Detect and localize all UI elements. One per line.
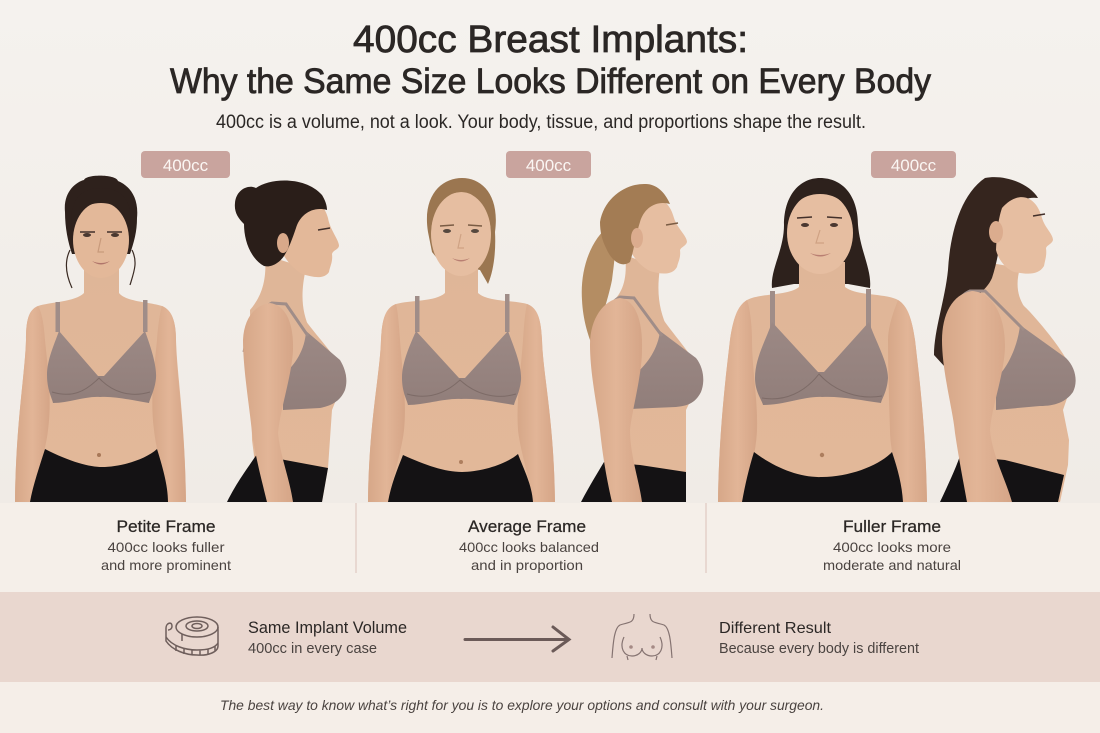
label: petite frame — [101, 517, 231, 573]
panel: petite frame figures — [15, 151, 346, 502]
subtitle: 400cc is a volume, not a look. Your body, tissue, and proportions shape the result. — [216, 112, 866, 133]
figure: fuller front view — [718, 178, 927, 502]
label: average frame: and in proportion — [471, 557, 583, 573]
volume badge: petite — [141, 151, 230, 178]
volume badge: average — [506, 151, 591, 178]
panel: average frame figures — [368, 151, 703, 502]
label: average frame: 400cc looks balanced — [459, 539, 599, 555]
page background — [0, 0, 1100, 503]
panel: footer note — [0, 682, 1100, 733]
figure: average side view — [581, 184, 703, 502]
panel: same volume, different result band — [0, 592, 1100, 682]
label: average frame: Average Frame — [468, 517, 586, 536]
panel: footer note: The best way to know what’s right for you is to explore your options and consult with your surgeon. — [220, 697, 824, 713]
volume badge: fuller — [871, 151, 956, 178]
title: Why the Same Size Looks Different on Every Body — [170, 62, 931, 101]
volume badge: fuller: 400cc — [891, 156, 937, 175]
text: different result: Different Result — [719, 620, 832, 637]
volume badge: petite: 400cc — [163, 156, 209, 175]
label: average frame — [459, 517, 599, 573]
title: 400cc Breast Implants: — [353, 19, 748, 61]
volume badge: average: 400cc — [526, 156, 572, 175]
label: fuller frame: moderate and natural — [823, 557, 961, 573]
panel: frame labels band — [0, 503, 1100, 592]
label: petite frame: 400cc looks fuller — [108, 539, 225, 555]
title — [170, 19, 931, 101]
label: petite frame: Petite Frame — [116, 517, 216, 536]
figure: petite front view — [15, 176, 186, 502]
text: different result — [719, 620, 919, 657]
arrow — [465, 627, 569, 651]
panel: fuller frame figures — [718, 151, 1076, 502]
label: fuller frame — [823, 517, 961, 573]
text: same implant volume: Same Implant Volume — [248, 619, 407, 637]
label: fuller frame: 400cc looks more — [833, 539, 951, 555]
figure: petite side view — [227, 181, 346, 502]
label: petite frame: and more prominent — [101, 557, 231, 573]
text: same implant volume — [248, 619, 407, 657]
label: fuller frame: Fuller Frame — [843, 517, 941, 536]
figure: fuller side view — [934, 177, 1076, 502]
text: different result: Because every body is different — [719, 641, 919, 657]
icon: measuring tape — [166, 617, 218, 655]
text: same implant volume: 400cc in every case — [248, 641, 377, 657]
figure: average front view — [368, 178, 555, 502]
icon: torso outline — [612, 614, 672, 660]
